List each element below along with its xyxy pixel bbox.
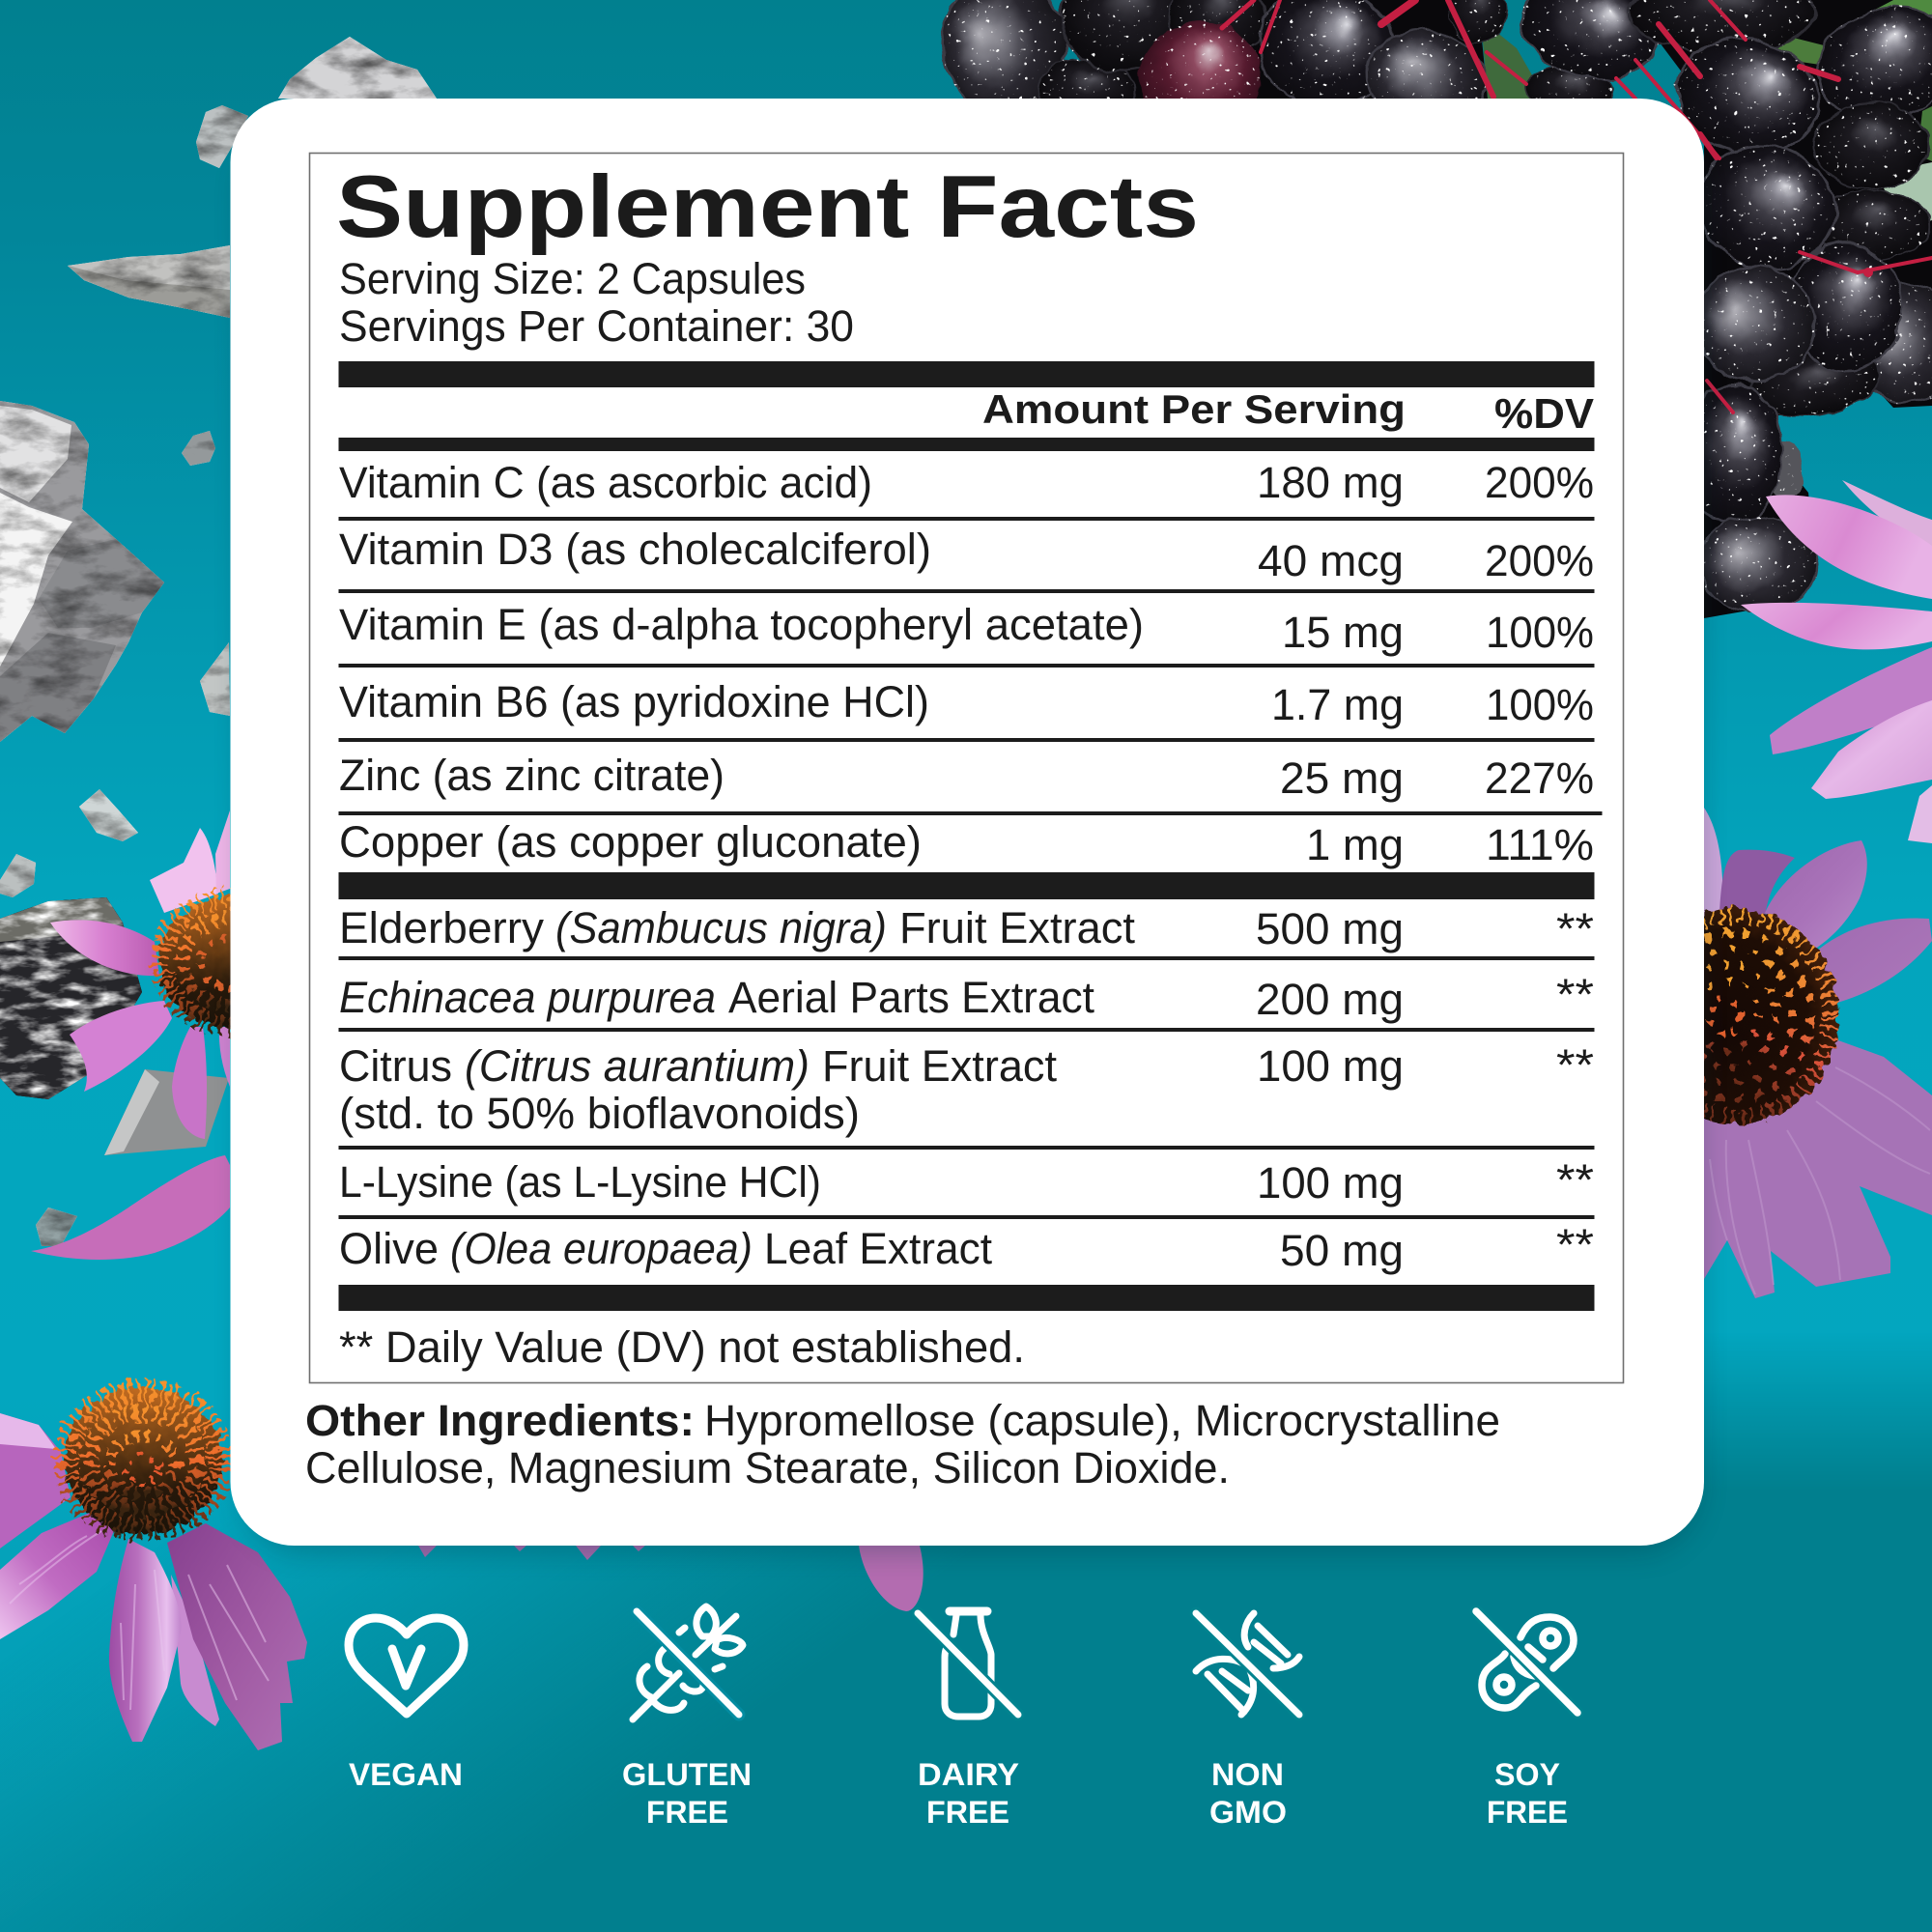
icon: soy free (1476, 1611, 1577, 1713)
row: Zinc: Zinc (as zinc citrate) (339, 751, 724, 800)
rock: card edge (200, 642, 230, 716)
rock: shard (68, 245, 230, 318)
seed cone (1634, 908, 1838, 1124)
small petal tips below card (418, 1546, 923, 1611)
title: Supplement Facts (336, 158, 1199, 256)
card shadow (242, 126, 1700, 1553)
row: Vitamin E: 15 mg (1282, 608, 1404, 657)
rock: large (0, 401, 164, 742)
row: Vitamin D3 (339, 525, 1594, 585)
rock: wedge (104, 1069, 229, 1155)
label: gluten free: GLUTEN (622, 1757, 752, 1792)
row: Vitamin D3: 200% (1485, 536, 1594, 585)
other ingredients: Hypromellose (capsule), Microcrystalline (704, 1396, 1500, 1445)
label: gluten free (622, 1757, 752, 1830)
row: Vitamin B6: Vitamin B6 (as pyridoxine HCl) (339, 677, 929, 726)
flower: bottom left (0, 1387, 307, 1750)
rock: small upper (196, 105, 248, 168)
row: Copper (339, 817, 1594, 869)
rock: top (278, 37, 437, 99)
row: Olive: ** (1556, 1220, 1594, 1269)
rock: small bottom (36, 1208, 77, 1246)
row: Echinacea: Aerial Parts Extract (728, 973, 1094, 1022)
dark backdrop and leaves (1101, 0, 1932, 618)
row: Citrus: Citrus (339, 1041, 452, 1091)
row: Olive: 50 mg (1280, 1226, 1404, 1275)
row: Zinc (339, 751, 1594, 803)
row: Vitamin C (339, 458, 1594, 507)
other ingredients (305, 1396, 1500, 1492)
column headers: %DV (1494, 390, 1595, 438)
petals (0, 1413, 307, 1750)
rock: small lower (79, 789, 138, 841)
berries: right column (1664, 0, 1932, 612)
row: Echinacea: ** (1556, 970, 1594, 1019)
row: L-Lysine: L-Lysine (as L-Lysine HCl) (339, 1157, 821, 1207)
row: Elderberry: Elderberry (339, 903, 545, 952)
label: soy free: FREE (1487, 1795, 1568, 1830)
panel: supplement facts table (309, 153, 1623, 1383)
column headers (982, 386, 1595, 438)
row: Vitamin E: 100% (1486, 608, 1594, 657)
flower: upper right petals (1741, 480, 1932, 843)
row: Vitamin C: Vitamin C (as ascorbic acid) (339, 458, 872, 507)
seed cone (64, 1387, 222, 1534)
serving info: Serving Size: 2 Capsules (339, 254, 806, 303)
row: Citrus (339, 1040, 1594, 1138)
label: dairy free: DAIRY (918, 1757, 1019, 1792)
serving info: Servings Per Container: 30 (339, 301, 854, 351)
row: Citrus: Fruit Extract (822, 1041, 1057, 1091)
thick rules (338, 361, 1594, 1311)
row: Vitamin D3: 40 mcg (1258, 536, 1404, 585)
row: Vitamin D3: Vitamin D3 (as cholecalciferol) (339, 525, 931, 574)
label: non gmo: GMO (1209, 1795, 1287, 1830)
label: non gmo (1209, 1757, 1287, 1830)
row dividers (338, 517, 1602, 1219)
footnote: ** Daily Value (DV) not established. (339, 1322, 1025, 1372)
seed cone (158, 896, 305, 1028)
row: Olive: Olive (339, 1224, 439, 1273)
row: Elderberry (339, 903, 1594, 953)
row: L-Lysine (339, 1155, 1594, 1208)
row: Vitamin E (339, 600, 1594, 657)
flower: large right (1634, 808, 1932, 1298)
rocks: floating zinc minerals at left (0, 37, 437, 1246)
row: L-Lysine: ** (1556, 1155, 1594, 1205)
label: gluten free: FREE (646, 1795, 728, 1830)
row: Citrus: (std. to 50% bioflavonoids) (339, 1089, 860, 1138)
petals (1704, 808, 1932, 1298)
row: Vitamin B6: 1.7 mg (1271, 680, 1404, 729)
row: Elderberry: Fruit Extract (899, 903, 1135, 952)
row: Citrus: 100 mg (1257, 1041, 1404, 1091)
row: Echinacea (339, 970, 1594, 1024)
row: Vitamin E: Vitamin E (as d-alpha tocopheryl acetate) (339, 600, 1144, 649)
icon: non gmo dna (1196, 1613, 1299, 1715)
row: Zinc: 25 mg (1280, 753, 1404, 803)
row: Citrus: (Citrus aurantium) (465, 1041, 810, 1091)
row: Vitamin B6: 100% (1486, 680, 1594, 729)
row: Echinacea: Echinacea purpurea (339, 973, 716, 1022)
berries: top row (931, 0, 1813, 141)
row: Olive: Leaf Extract (764, 1224, 992, 1273)
rock: dark veined (0, 897, 142, 1099)
other ingredients: Cellulose, Magnesium Stearate, Silicon Dioxide. (305, 1443, 1230, 1492)
row: Echinacea: 200 mg (1256, 975, 1404, 1024)
label: soy free (1487, 1757, 1568, 1830)
red berry stems (1222, 0, 1932, 412)
row: Elderberry: ** (1556, 904, 1594, 953)
label: dairy free (918, 1757, 1019, 1830)
row: Zinc: 227% (1485, 753, 1594, 803)
serving info (339, 254, 854, 351)
label: dairy free: FREE (926, 1795, 1009, 1830)
petals (50, 810, 230, 1139)
icon: vegan heart (349, 1618, 464, 1714)
rock: left fragment (0, 854, 36, 897)
icon: dairy free bottle (918, 1611, 1018, 1717)
row: Vitamin B6 (339, 677, 1594, 729)
row: Copper: Copper (as copper gluconate) (339, 817, 922, 867)
row: Vitamin C: 180 mg (1257, 458, 1404, 507)
row: Citrus: ** (1556, 1040, 1594, 1090)
table border (309, 153, 1623, 1383)
loose petal (31, 1155, 230, 1260)
row: Elderberry: (Sambucus nigra) (555, 903, 887, 952)
label: soy free: SOY (1494, 1757, 1560, 1792)
row: Elderberry: 500 mg (1256, 904, 1404, 953)
row: L-Lysine: 100 mg (1257, 1158, 1404, 1208)
loose petals and flower: left (31, 810, 305, 1260)
white card (230, 99, 1704, 1546)
icon: gluten free (633, 1606, 743, 1719)
row: Vitamin C: 200% (1485, 458, 1594, 507)
row: Copper: 1 mg (1306, 820, 1404, 869)
row: Copper: 111% (1486, 820, 1594, 869)
berries (931, 0, 1932, 612)
label: vegan: VEGAN (349, 1757, 463, 1792)
row: Olive: (Olea europaea) (450, 1224, 753, 1273)
row: Olive (339, 1220, 1594, 1275)
label: non gmo: NON (1211, 1757, 1284, 1792)
rock: small mid (182, 431, 215, 466)
other ingredients: Other Ingredients: (305, 1396, 695, 1445)
elderberry cluster (931, 0, 1932, 618)
column headers: Amount Per Serving (982, 386, 1406, 432)
